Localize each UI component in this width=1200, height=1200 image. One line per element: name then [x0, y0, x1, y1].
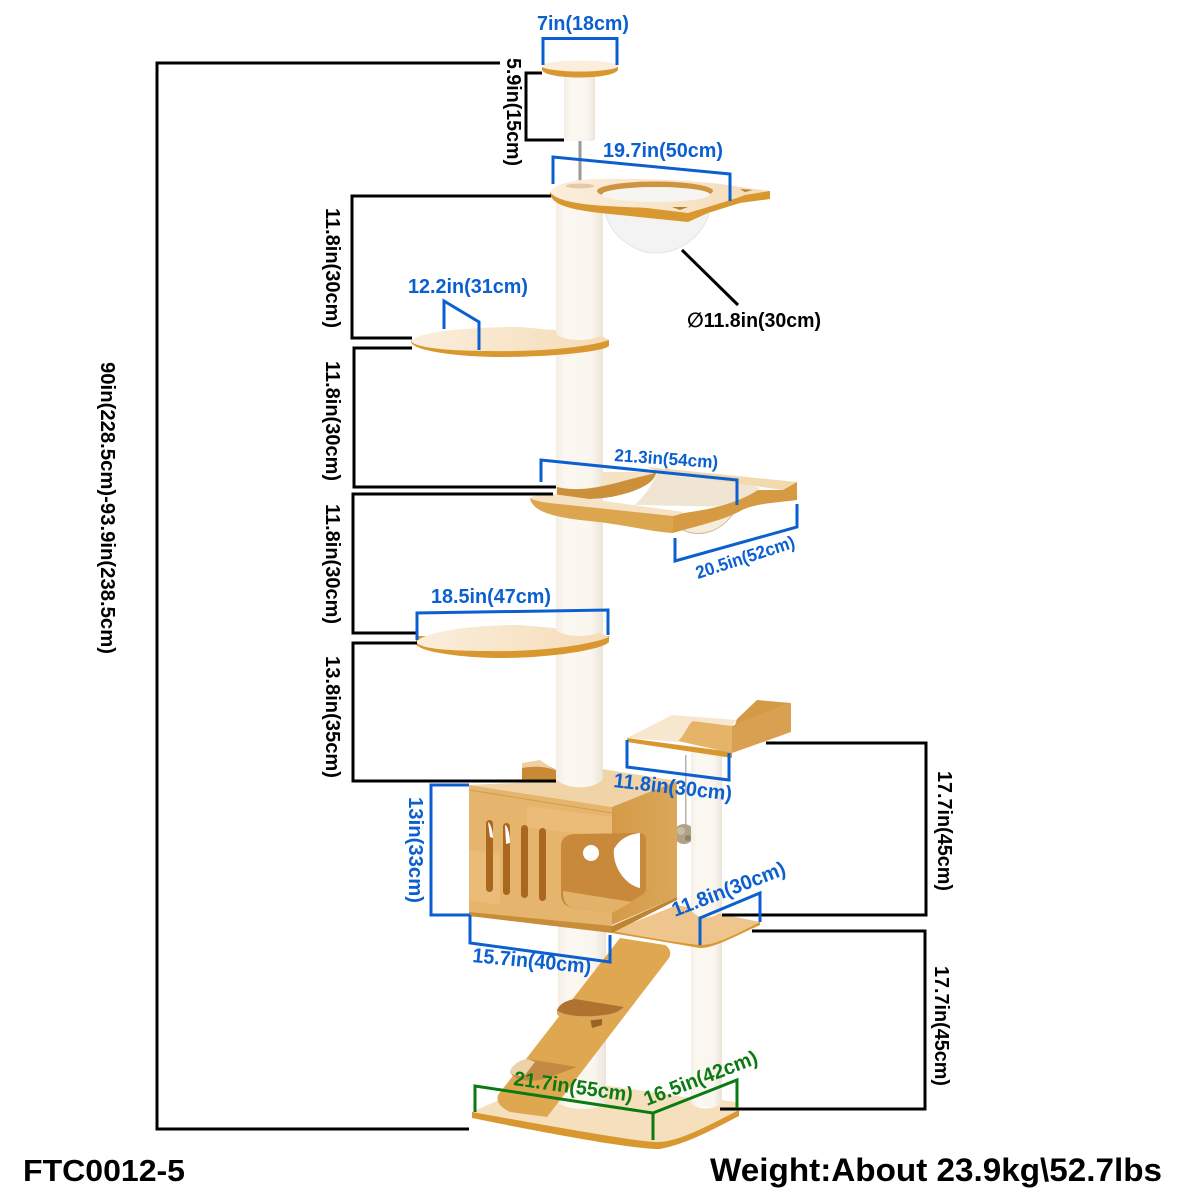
half-moon shelf 18.5in [416, 590, 609, 658]
bottom edge [469, 912, 612, 933]
model number: FTC0012-5 [23, 1153, 185, 1188]
label: spacing 1: 11.8in(30cm) [321, 208, 344, 328]
perch disc [542, 67, 618, 78]
ear cut-outs [672, 189, 753, 210]
lower main post [558, 925, 606, 1113]
front face [469, 785, 612, 932]
back rail [648, 467, 797, 490]
label: bubble diameter: ∅11.8in(30cm) [687, 309, 821, 332]
upper post [564, 74, 595, 141]
label: upper tier height: 17.7in(45cm) [933, 771, 956, 891]
lower post foot [558, 1082, 606, 1109]
weight: Weight:About 23.9kg\52.7lbs [710, 1152, 1162, 1188]
bubble opening [597, 182, 713, 200]
round window [583, 845, 599, 861]
front rail [530, 498, 673, 533]
rod base [566, 184, 594, 188]
label: spacing 3: 11.8in(30cm) [321, 504, 344, 624]
top perch [542, 60, 618, 185]
opening [561, 833, 646, 913]
side face [612, 781, 677, 925]
label: base width: 21.7in(55cm) [512, 1067, 634, 1107]
rear tab [522, 761, 556, 781]
cat tree product [411, 60, 797, 1149]
label: hammock depth: 20.5in(52cm) [693, 532, 797, 583]
label: shelf width: 18.5in(47cm) [431, 585, 551, 608]
blue dimension lines [417, 38, 797, 962]
half-moon shelf 12.2in [411, 300, 609, 357]
label: platform width: 19.7in(50cm) [603, 139, 723, 162]
base board [472, 1083, 739, 1149]
front wall [678, 721, 732, 753]
ramp [498, 938, 670, 1117]
right post foot [691, 1060, 721, 1106]
condo top [469, 769, 677, 807]
black dimension lines [157, 63, 926, 1129]
label: top perch width: 7in(18cm) [537, 12, 629, 35]
tray perch [627, 700, 791, 758]
lower step [510, 1059, 577, 1081]
back arc [557, 472, 656, 499]
right rail [673, 482, 797, 533]
side window [614, 833, 640, 888]
bubble dome [604, 208, 709, 253]
connecting rod [578, 141, 582, 185]
label: condo width: 15.7in(40cm) [472, 944, 592, 978]
side wall [732, 703, 791, 753]
lower shelf [612, 780, 760, 948]
label: shelf depth: 12.2in(31cm) [408, 275, 528, 298]
label: lower shelf depth: 11.8in(30cm) [669, 857, 789, 922]
hammock platform [530, 440, 797, 533]
green base dimension lines [475, 1080, 737, 1140]
label: condo height: 13in(33cm) [404, 797, 427, 903]
opening floor [563, 891, 632, 913]
label: base depth: 16.5in(42cm) [641, 1046, 761, 1111]
wooden condo [469, 740, 677, 933]
label: tray width: 11.8in(30cm) [612, 769, 733, 805]
label: spacing 2: 11.8in(30cm) [321, 361, 344, 481]
label: lower tier height: 17.7in(45cm) [930, 966, 953, 1086]
hammock fabric [635, 473, 760, 507]
main sisal post [556, 200, 603, 920]
hammock dome [680, 514, 733, 533]
upper step [557, 999, 624, 1028]
tray base [627, 738, 732, 758]
right sisal post [691, 745, 722, 1107]
label: overall height: 90in(228.5cm)-93.9in(238.5cm) [96, 362, 119, 654]
back surface [600, 472, 656, 486]
label: hammock width: 21.3in(54cm) [614, 445, 719, 472]
label: spacing 4: 13.8in(35cm) [321, 656, 344, 778]
toy ball [674, 755, 694, 844]
cat-ear platform [550, 179, 770, 222]
label: top post height: 5.9in(15cm) [502, 58, 525, 166]
front slots [486, 820, 493, 892]
wood blocks [469, 806, 612, 905]
back wall [735, 700, 791, 725]
slot highlights [488, 822, 510, 844]
